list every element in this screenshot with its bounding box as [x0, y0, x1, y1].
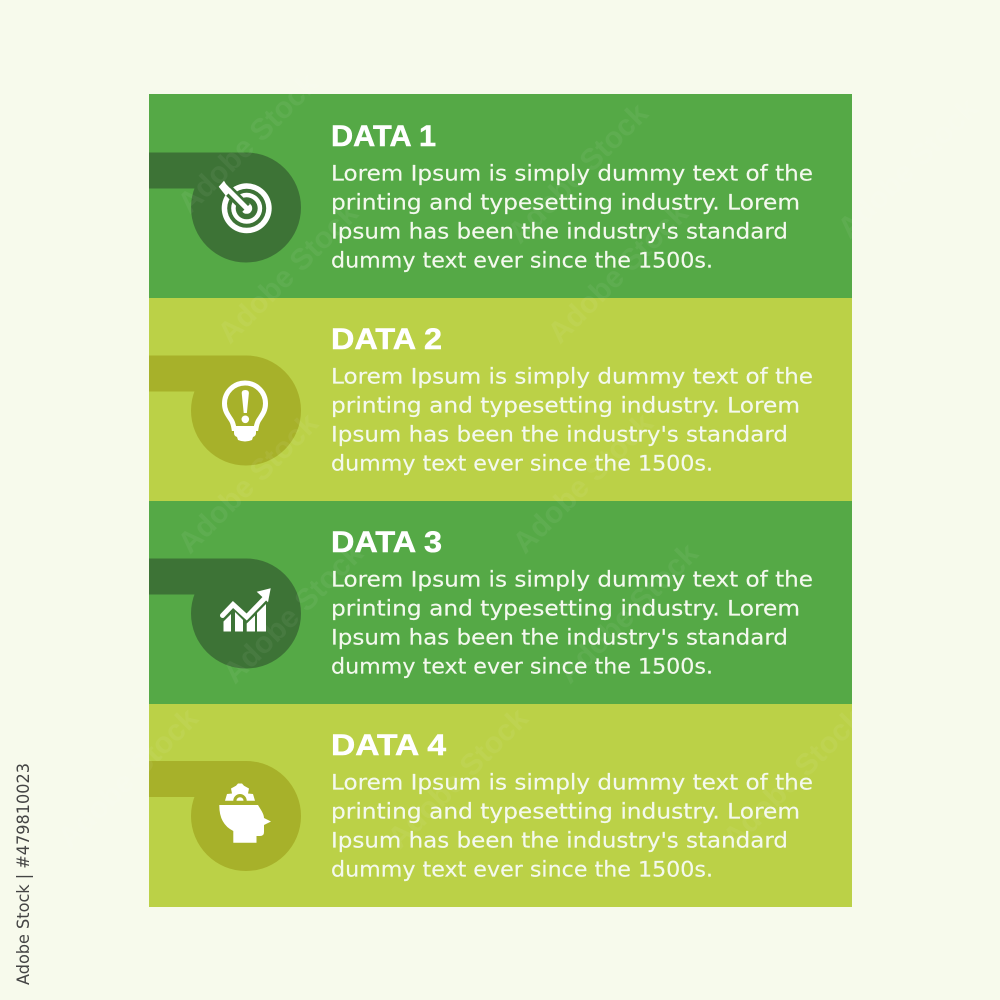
text: Adobe Stock [542, 197, 695, 350]
heading: data 3: DATA 3 [331, 526, 442, 559]
text block: data 1: Lorem Ipsum is simply dummy text of the [331, 162, 813, 186]
text block: data 3 [331, 568, 813, 678]
text: Adobe Stock [832, 92, 985, 245]
text block: data 3: Lorem Ipsum is simply dummy text of the [331, 568, 813, 592]
heading: data 4: DATA 4 [331, 729, 447, 762]
text block: data 1: Ipsum has been the industry's standard [331, 220, 788, 244]
connector badge 1 [149, 152, 301, 262]
text: Adobe Stock [52, 702, 205, 855]
panel: data 4 [149, 704, 852, 907]
connector badge 3 [149, 558, 301, 668]
text block: data 3: printing and typesetting industry. Lorem [331, 596, 800, 620]
panel: data 1 [149, 94, 852, 298]
watermark: stock id: Adobe Stock | #479810023 [14, 763, 34, 985]
text block: data 4: dummy text ever since the 1500s. [331, 858, 713, 882]
text block: data 4 [331, 770, 813, 882]
text block: data 1 [331, 162, 813, 272]
heading: data 2: DATA 2 [331, 323, 442, 356]
text block: data 2: printing and typesetting industry. Lorem [331, 394, 800, 418]
text block: data 1: dummy text ever since the 1500s. [331, 248, 713, 272]
icon: head with gear [219, 784, 271, 843]
text block: data 4: printing and typesetting industry. Lorem [331, 800, 800, 824]
text: Adobe Stock [172, 67, 325, 220]
text: Adobe Stock [717, 702, 870, 855]
text block: data 2 [331, 364, 813, 476]
text block: data 4: Lorem Ipsum is simply dummy text of the [331, 770, 813, 794]
heading: data 1: DATA 1 [331, 120, 436, 153]
text block: data 2: Ipsum has been the industry's standard [331, 422, 788, 446]
text: Adobe Stock [382, 702, 535, 855]
panel: data 2 [149, 298, 852, 501]
text: Adobe Stock [212, 197, 365, 350]
text: Adobe Stock [217, 537, 370, 690]
connector badge 2 [149, 356, 301, 466]
text: Adobe Stock [172, 407, 325, 560]
text block: data 3: Ipsum has been the industry's standard [331, 626, 788, 650]
text block: data 2: dummy text ever since the 1500s. [331, 452, 713, 476]
connector badge 4 [149, 761, 301, 871]
text block: data 2: Lorem Ipsum is simply dummy text of the [331, 364, 813, 388]
text block: data 1: printing and typesetting industry. Lorem [331, 190, 800, 214]
text block: data 4: Ipsum has been the industry's standard [331, 828, 788, 852]
icon: light bulb with exclamation [224, 383, 266, 442]
icon: growth chart [222, 588, 271, 632]
text: Adobe Stock [507, 407, 660, 560]
text: Adobe Stock [552, 537, 705, 690]
panel: data 3 [149, 501, 852, 704]
text block: data 3: dummy text ever since the 1500s. [331, 654, 713, 678]
icon: target with arrow [219, 181, 272, 233]
text: Adobe Stock [502, 97, 655, 250]
